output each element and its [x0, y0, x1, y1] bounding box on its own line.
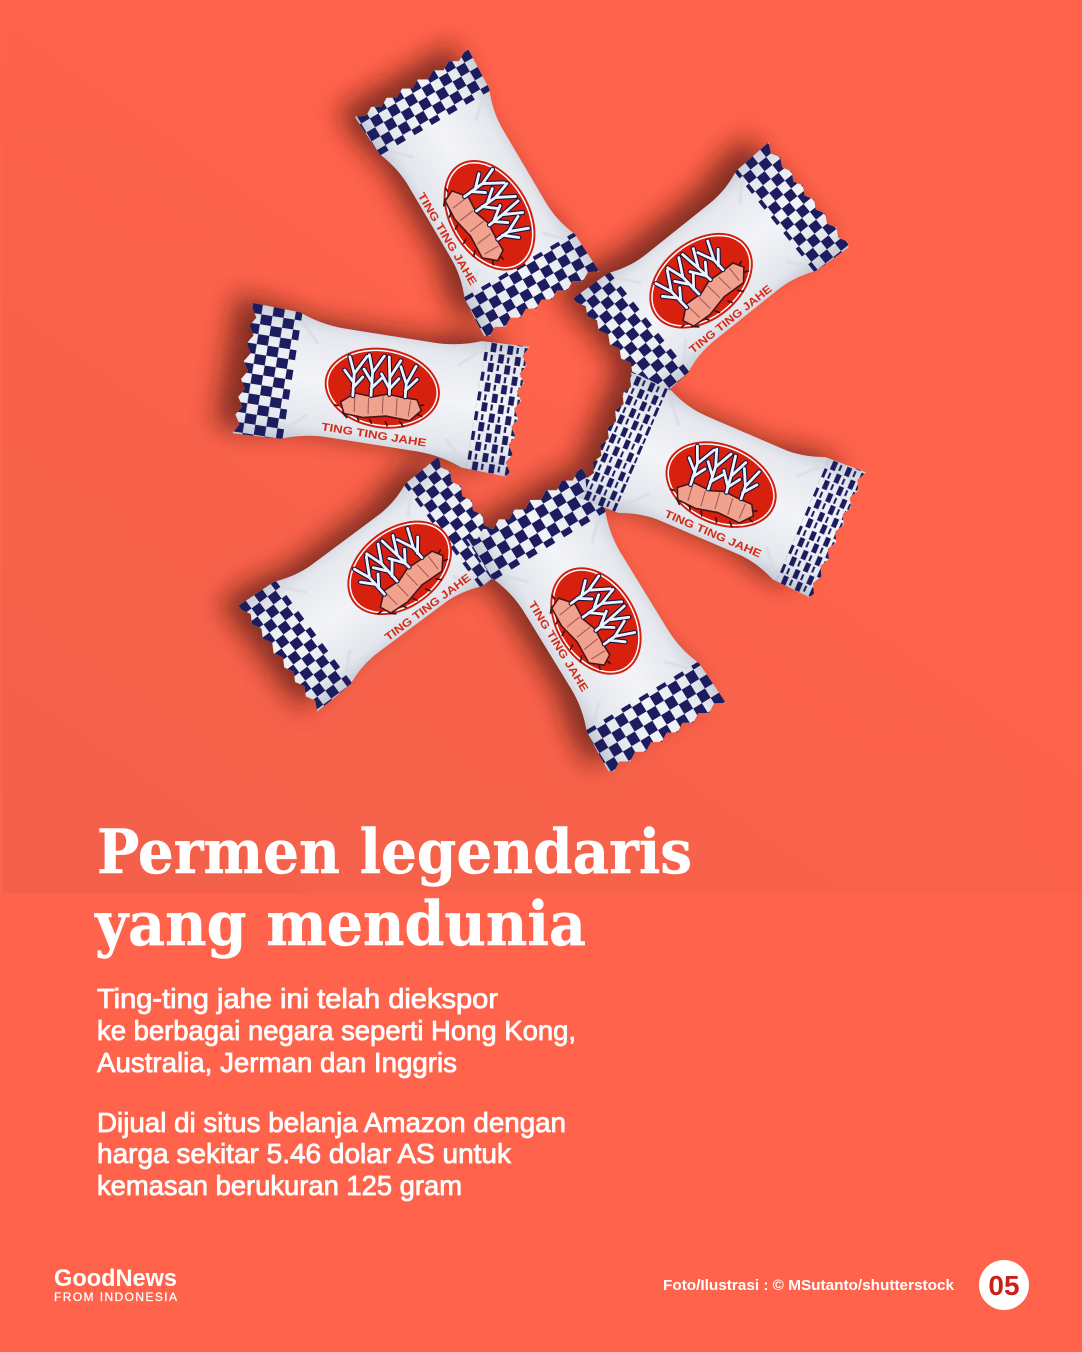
text block: export countries: [97, 983, 576, 1078]
candy: left: [231, 302, 531, 478]
page number badge: 05: [988, 1270, 1020, 1301]
text block: export countries: Ting-ting jahe ini telah diekspor: [97, 983, 498, 1014]
candy: right: TING TING JAHE: [663, 508, 763, 560]
title: yang mendunia: [94, 889, 586, 960]
text block: Amazon price: harga sekitar 5.46 dolar AS untuk: [97, 1138, 512, 1169]
candy: lower left: TING TING JAHE: [383, 572, 473, 644]
logo: GoodNews from Indonesia: FROM INDONESIA: [54, 1290, 177, 1304]
title: Permen legendaris: [97, 817, 692, 888]
candy: bottom: [465, 467, 727, 775]
title: [94, 817, 692, 960]
candy: upper right: [572, 141, 852, 403]
candy: upper right: TING TING JAHE: [687, 283, 774, 356]
candy: right: [576, 370, 868, 600]
text block: Amazon price: Dijual di situs belanja Amazon dengan: [97, 1107, 566, 1138]
logo: GoodNews from Indonesia: GoodNews: [54, 1265, 177, 1292]
candy: lower left: [237, 455, 519, 713]
photo credit: Foto/Ilustrasi : © MSutanto/shutterstock: [663, 1277, 955, 1294]
text block: export countries: Australia, Jerman dan Inggris: [97, 1047, 457, 1078]
candy: bottom: TING TING JAHE: [526, 599, 590, 694]
candy: top: [353, 48, 601, 340]
logo: GoodNews from Indonesia: [54, 1265, 177, 1304]
text block: Amazon price: kemasan berukuran 125 gram: [97, 1170, 462, 1201]
candy: top: TING TING JAHE: [415, 191, 479, 288]
candy: left: TING TING JAHE: [321, 421, 427, 450]
photo surface panel: [2, 0, 1082, 893]
candy shadows: [213, 42, 842, 768]
text block: Amazon price: [97, 1107, 566, 1201]
text block: export countries: ke berbagai negara seperti Hong Kong,: [97, 1015, 576, 1046]
page number badge: [979, 1260, 1029, 1310]
